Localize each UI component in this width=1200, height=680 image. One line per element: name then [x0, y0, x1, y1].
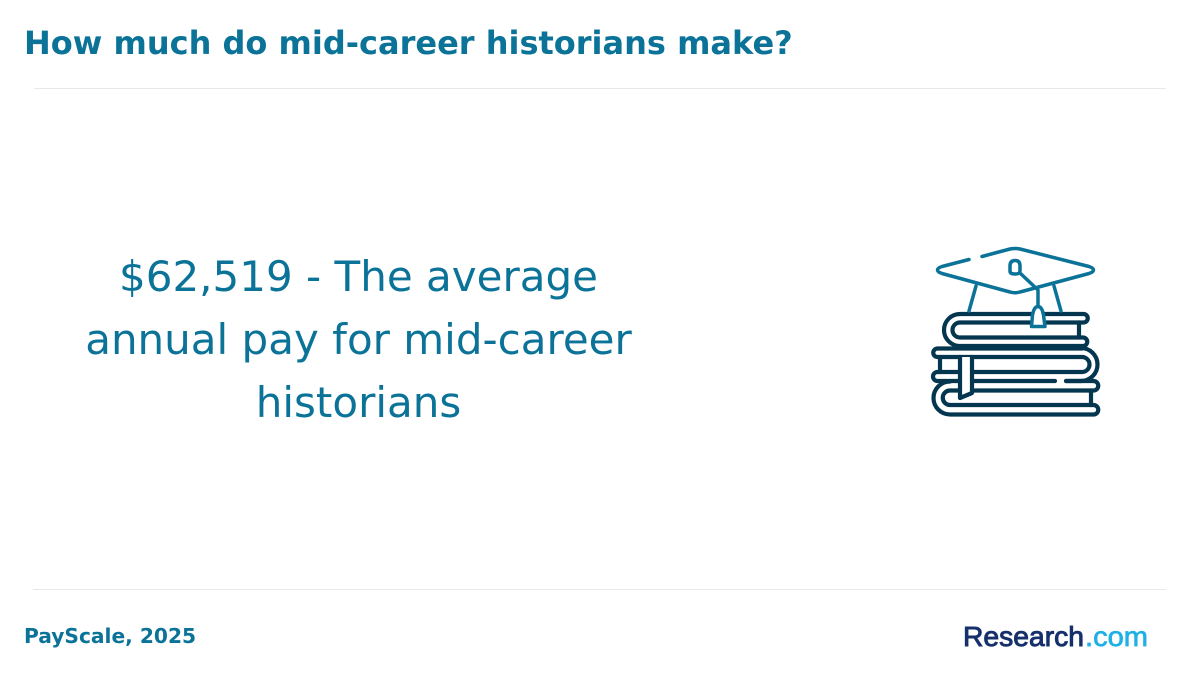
main statement text: historians	[256, 378, 461, 427]
icon: graduation cap on stacked books	[930, 246, 1100, 417]
logo: Research.com: Research	[963, 621, 1084, 652]
main statement text	[85, 252, 632, 427]
logo: Research.com: .com	[1085, 621, 1148, 652]
logo: Research.com	[963, 621, 1148, 652]
icon: graduation cap	[938, 248, 1094, 326]
main statement text: annual pay for mid-career	[85, 315, 632, 364]
title: How much do mid-career historians make?	[24, 24, 793, 62]
icon: stacked books	[933, 314, 1098, 414]
source label: PayScale, 2025	[24, 624, 196, 648]
main statement text: $62,519 - The average	[119, 252, 598, 301]
